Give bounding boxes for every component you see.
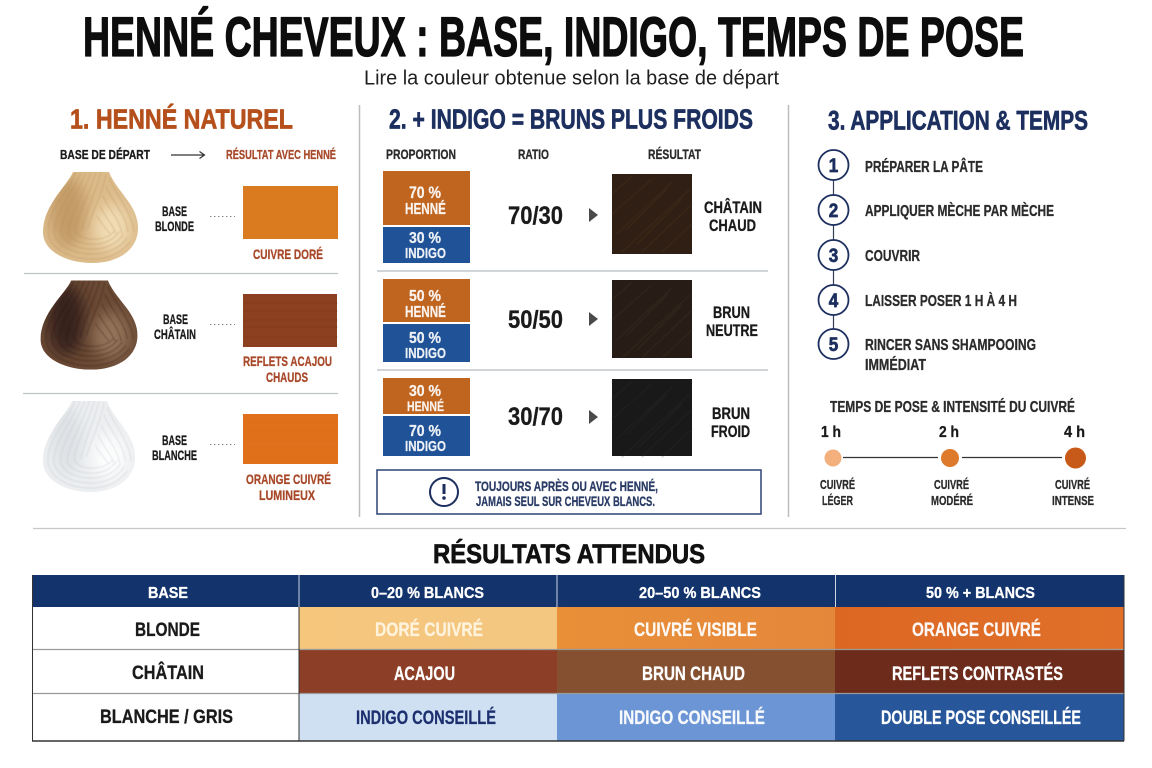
step 3 [818,240,920,270]
panel: indigo [377,104,768,514]
heading: henné naturel: 1. HENNÉ NATUREL [70,104,293,134]
callout text: JAMAIS SEUL SUR CHEVEUX BLANCS. [476,493,655,509]
stage 1 h: 1 h [821,424,841,441]
icon: blonde hair swatch [40,170,140,265]
icon: brown hair swatch [38,279,140,372]
row: 30/70 [383,378,750,457]
table row: blonde: BLONDE [135,620,200,641]
label: reflets acajou chauds [243,353,332,385]
step 2 [818,195,1054,225]
table row: châtain: ACAJOU [394,664,455,685]
stage 2 h: 2 h [939,424,959,441]
swatch: châtain chaud [612,174,692,254]
label: brun froid [711,405,750,441]
table header row: 50 % + BLANCS [926,585,1035,602]
label: base blonde: BASE [162,203,187,219]
step 4: 4 [829,291,839,312]
proportion bar 50/50: 50 % [409,288,441,305]
proportion bar 30/70: 70 % [409,423,441,440]
label: cuivre doré: CUIVRE DORÉ [253,246,323,262]
arrow [589,410,598,424]
label: reflets acajou chauds: CHAUDS [266,369,308,385]
section: résultats attendus [32,538,1124,741]
table row: châtain: BRUN CHAUD [642,664,745,685]
proportion bar 70/30: INDIGO [405,245,446,262]
results table [32,575,1124,741]
label: châtain chaud: CHAUD [709,217,756,235]
swatch: cuivre doré [243,186,338,239]
proportion bar 70/30 [383,171,470,263]
table header row [32,575,1124,607]
label: base châtain [154,311,196,342]
label: brun froid: FROID [711,423,750,441]
label: base blonde: BLONDE [155,218,194,234]
panel: henné naturel [23,104,338,503]
ratio 50/50: 50/50 [508,306,563,334]
step 3: 3 [829,246,838,267]
stage 4 h: 4 h [1064,424,1085,441]
column label: ratio: RATIO [518,147,549,162]
step 4 [818,285,1017,315]
table row: blanche / gris: BLANCHE / GRIS [100,707,233,728]
proportion bar 50/50: INDIGO [405,345,446,362]
arrow [589,312,598,326]
row: base blanche [40,399,338,503]
label: châtain chaud [704,198,762,235]
stage 4 h: INTENSE [1052,493,1094,508]
arrow [171,152,204,158]
swatch: reflets acajou [243,294,338,347]
row: 70/30 [383,171,762,263]
proportion bar 70/30: HENNÉ [405,199,446,218]
label: base blanche: BASE [162,432,187,448]
steps list [818,150,1054,374]
table row: blanche / gris: INDIGO CONSEILLÉ [356,707,496,729]
stage 1 h: LÉGER [822,493,853,508]
step 5: IMMÉDIAT [865,357,926,374]
step 4: LAISSER POSER 1 H À 4 H [865,293,1017,310]
label: orange cuivré lumineux [246,471,331,503]
label: brun neutre: NEUTRE [706,322,758,340]
swatch: brun froid [612,379,692,457]
table row: blonde [135,607,1124,649]
stage 2 h: MODÉRÉ [931,493,973,508]
step 5: 5 [829,335,839,356]
table row: châtain: REFLETS CONTRASTÉS [892,663,1063,685]
label: orange cuivré lumineux: LUMINEUX [259,487,315,503]
icon: white hair swatch [40,399,137,494]
step 1: 1 [829,156,839,177]
table row: blonde: DORÉ CUIVRÉ [375,619,483,641]
table header row: BASE [148,585,188,602]
table header row: 0–20 % BLANCS [371,585,484,602]
callout: indigo warning [377,470,761,514]
column label: résultat avec henné: RÉSULTAT AVEC HENNÉ [226,147,336,162]
label: châtain chaud: CHÂTAIN [704,198,762,217]
table row: châtain: CHÂTAIN [132,662,204,684]
heading: résultats attendus: RÉSULTATS ATTENDUS [433,538,705,569]
step 3: COUVRIR [865,248,920,265]
stage 4 h [1052,424,1094,508]
step 1: PRÉPARER LA PÂTE [865,158,983,176]
callout text: TOUJOURS APRÈS OU AVEC HENNÉ, [475,478,658,494]
heading: indigo: 2. + INDIGO = BRUNS PLUS FROIDS [389,104,753,134]
proportion bar 50/50 [383,279,470,362]
label: reflets acajou chauds: REFLETS ACAJOU [243,353,332,369]
proportion bar 70/30: 70 % [409,184,441,202]
swatch: brun neutre [612,280,692,358]
table row: blonde: ORANGE CUIVRÉ [912,619,1041,641]
table header row: 20–50 % BLANCS [639,585,761,602]
subtitle: Lire la couleur obtenue selon la base de départ [364,68,779,90]
timeline: temps de pose [820,399,1094,508]
label: orange cuivré lumineux: ORANGE CUIVRÉ [246,471,331,487]
proportion bar 70/30: 30 % [409,230,441,247]
stage 2 h: CUIVRÉ [934,477,969,492]
swatch: orange cuivré [243,414,338,464]
callout text [475,478,658,509]
row: base châtain [38,279,338,385]
label: brun neutre: BRUN [713,304,750,322]
label: brun froid: BRUN [712,405,750,423]
stage 1 h: CUIVRÉ [820,477,855,492]
timeline heading: TEMPS DE POSE & INTENSITÉ DU CUIVRÉ [830,399,1075,416]
label: base blonde [155,203,194,234]
table row: blonde: CUIVRÉ VISIBLE [634,619,757,641]
ratio 70/30: 70/30 [508,202,563,230]
proportion bar 30/70 [383,378,470,456]
table row: blanche / gris: DOUBLE POSE CONSEILLÉE [881,707,1081,729]
proportion bar 50/50: HENNÉ [405,302,446,321]
label: base blanche: BLANCHE [152,447,197,463]
proportion bar 30/70: INDIGO [405,438,446,455]
label: brun neutre [706,304,758,340]
arrow [589,208,598,222]
step 2: APPLIQUER MÈCHE PAR MÈCHE [865,203,1054,220]
icon: exclamation [430,478,458,506]
step 5: RINCER SANS SHAMPOOING [865,337,1036,354]
column label: base de départ: BASE DE DÉPART [60,147,150,162]
step 2: 2 [829,201,838,222]
proportion bar 30/70: HENNÉ [407,398,444,414]
table row: châtain [132,650,1124,693]
column label: proportion: PROPORTION [386,147,456,162]
stage 2 h [931,424,973,508]
label: base blanche [152,432,197,463]
proportion bar 30/70: 30 % [409,383,441,400]
column label: résultat: RÉSULTAT [648,147,702,162]
ratio 30/70: 30/70 [508,403,563,431]
step 5 [818,329,1036,374]
label: base châtain: BASE [163,311,188,327]
table row: blanche / gris: INDIGO CONSEILLÉ [619,707,765,729]
label: base châtain: CHÂTAIN [154,325,196,342]
heading: application et temps: 3. APPLICATION & TEMPS [828,106,1088,136]
step 1 [818,150,983,180]
row: base blonde [40,170,338,265]
table row: blanche / gris [100,694,1124,741]
stage 4 h: CUIVRÉ [1055,477,1090,492]
proportion bar 50/50: 50 % [409,330,441,347]
panel: application et temps [818,106,1094,508]
row: 50/50 [383,279,758,362]
stage 1 h [820,424,855,508]
